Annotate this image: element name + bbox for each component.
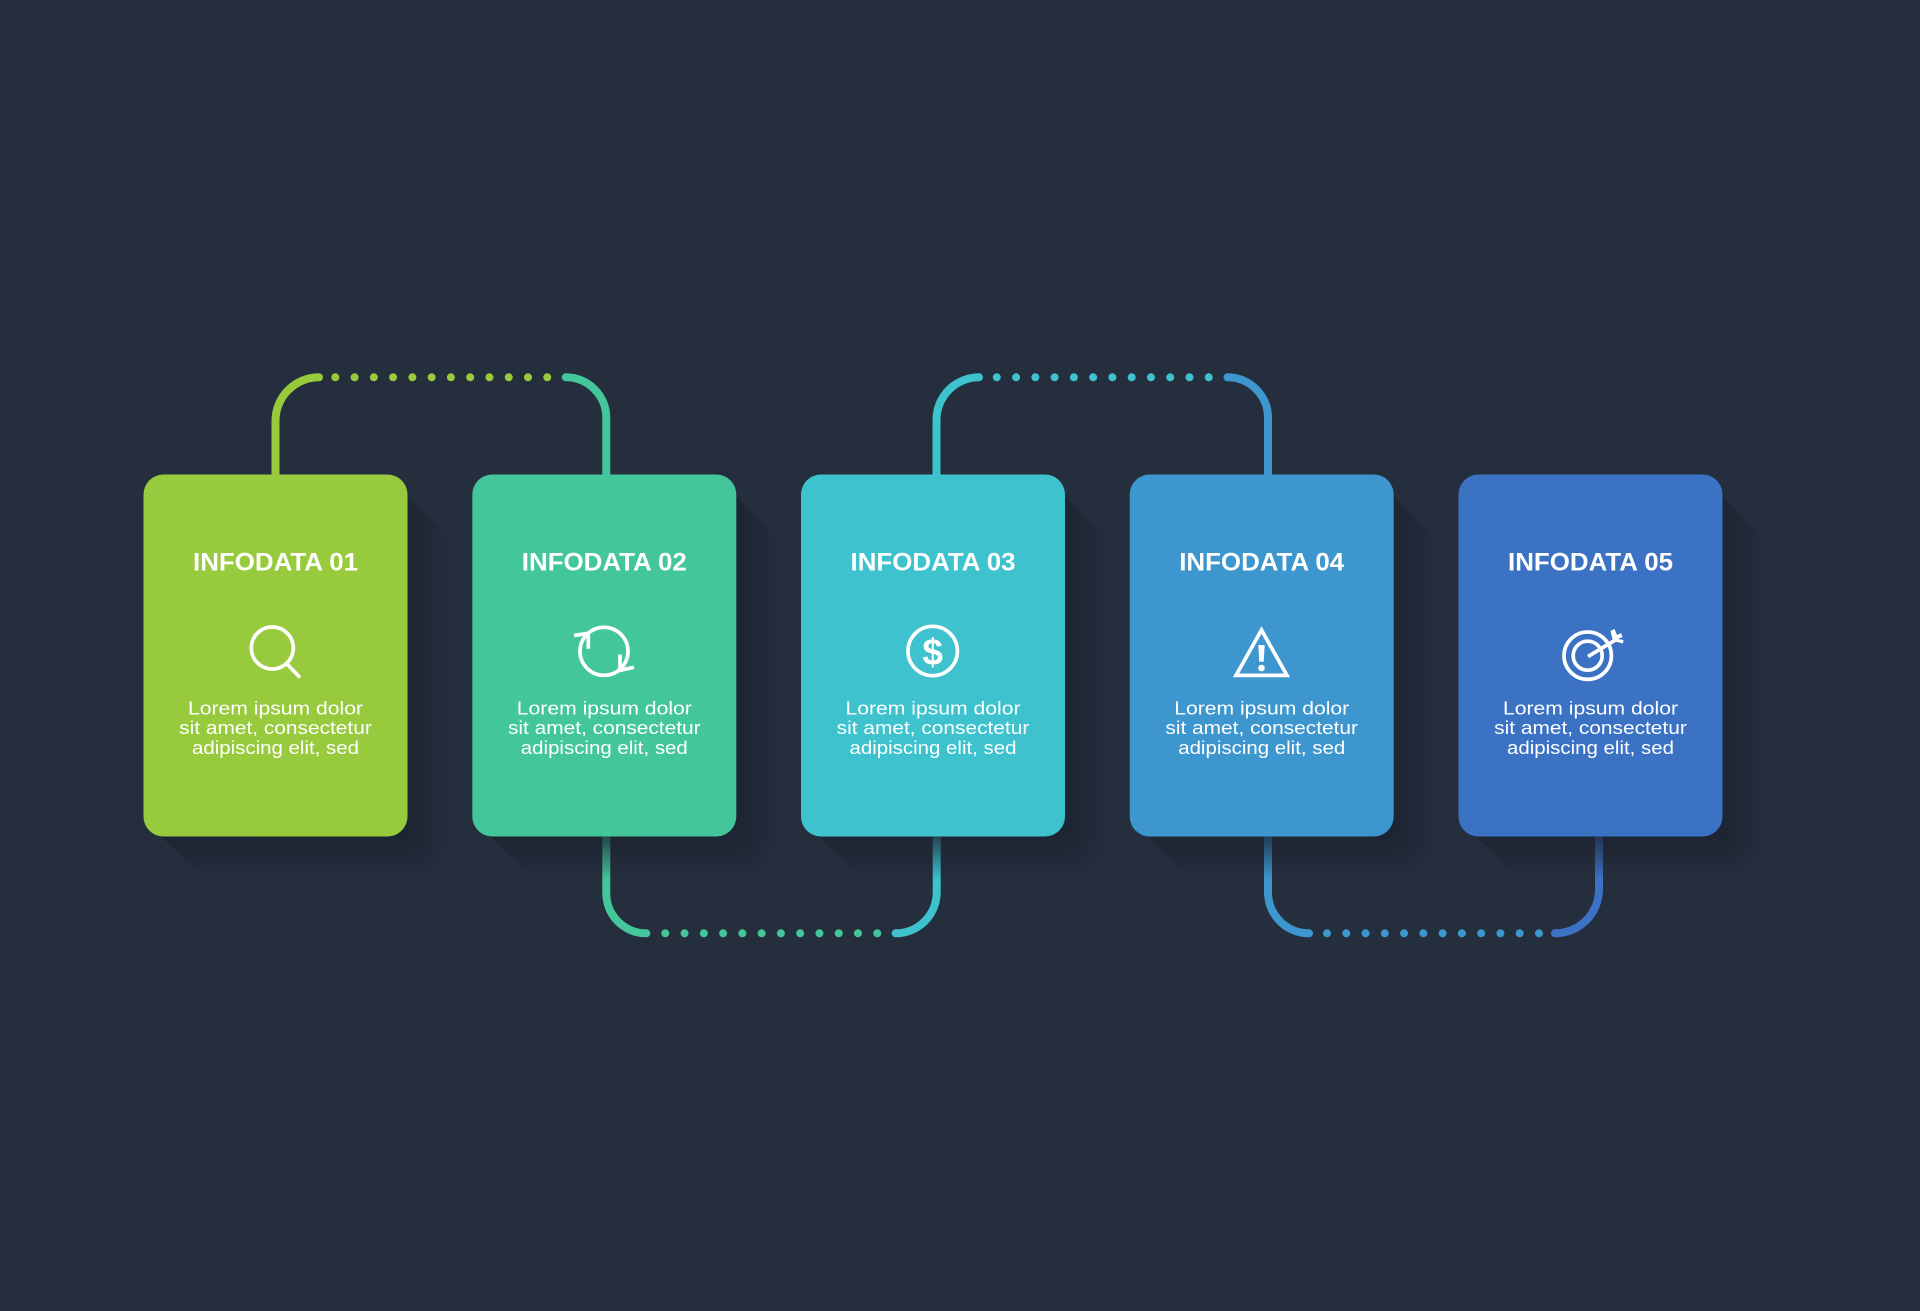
text block	[179, 698, 372, 758]
card	[1458, 474, 1722, 836]
connector: card 2 to card 3	[606, 820, 937, 933]
text block: sit amet, consectetur	[179, 718, 372, 738]
card	[144, 474, 408, 836]
text block: Lorem ipsum dolor	[1503, 698, 1678, 718]
text block: sit amet, consectetur	[1494, 718, 1687, 738]
card	[472, 474, 736, 836]
text block: Lorem ipsum dolor	[846, 698, 1021, 718]
connector: card 4 to card 5	[1268, 820, 1599, 933]
panel: infodata 02	[472, 474, 780, 880]
text block	[508, 698, 701, 758]
icon: magnifying glass	[251, 627, 300, 678]
long shadow	[1148, 474, 1438, 880]
panel: infodata 04	[1130, 474, 1438, 880]
text block: Lorem ipsum dolor	[1174, 698, 1349, 718]
text block	[1494, 698, 1687, 758]
panel: infodata 01	[144, 474, 452, 880]
panel: infodata 03	[801, 474, 1109, 880]
text block: Lorem ipsum dolor	[188, 698, 363, 718]
heading: INFODATA 02	[522, 548, 687, 576]
text block: sit amet, consectetur	[837, 718, 1029, 738]
text block: adipiscing elit, sed	[521, 738, 688, 758]
panel: infodata 05	[1458, 474, 1766, 880]
text block: sit amet, consectetur	[508, 718, 701, 738]
text block: Lorem ipsum dolor	[517, 698, 692, 718]
heading: INFODATA 03	[850, 548, 1016, 576]
connector: card 3 to card 4	[936, 377, 1268, 500]
text block: adipiscing elit, sed	[192, 738, 359, 758]
long shadow	[1476, 474, 1766, 880]
text block	[1165, 698, 1358, 758]
icon: refresh arrows	[574, 627, 634, 675]
icon: dollar coin: $	[922, 632, 943, 672]
text block: sit amet, consectetur	[1165, 718, 1358, 738]
heading: INFODATA 01	[193, 548, 358, 576]
connector: card 1 to card 2	[276, 377, 606, 500]
text block: adipiscing elit, sed	[850, 738, 1016, 758]
card	[1130, 474, 1394, 836]
heading: INFODATA 05	[1508, 548, 1673, 576]
text block	[837, 698, 1029, 758]
icon: warning triangle	[1236, 630, 1287, 675]
heading: INFODATA 04	[1179, 548, 1344, 576]
text block: adipiscing elit, sed	[1178, 738, 1345, 758]
long shadow	[162, 474, 452, 880]
icon: target with arrow	[1564, 629, 1624, 679]
card	[801, 474, 1065, 836]
long shadow	[819, 474, 1109, 880]
text block: adipiscing elit, sed	[1507, 738, 1674, 758]
icon: dollar coin	[908, 626, 957, 676]
long shadow	[490, 474, 780, 880]
